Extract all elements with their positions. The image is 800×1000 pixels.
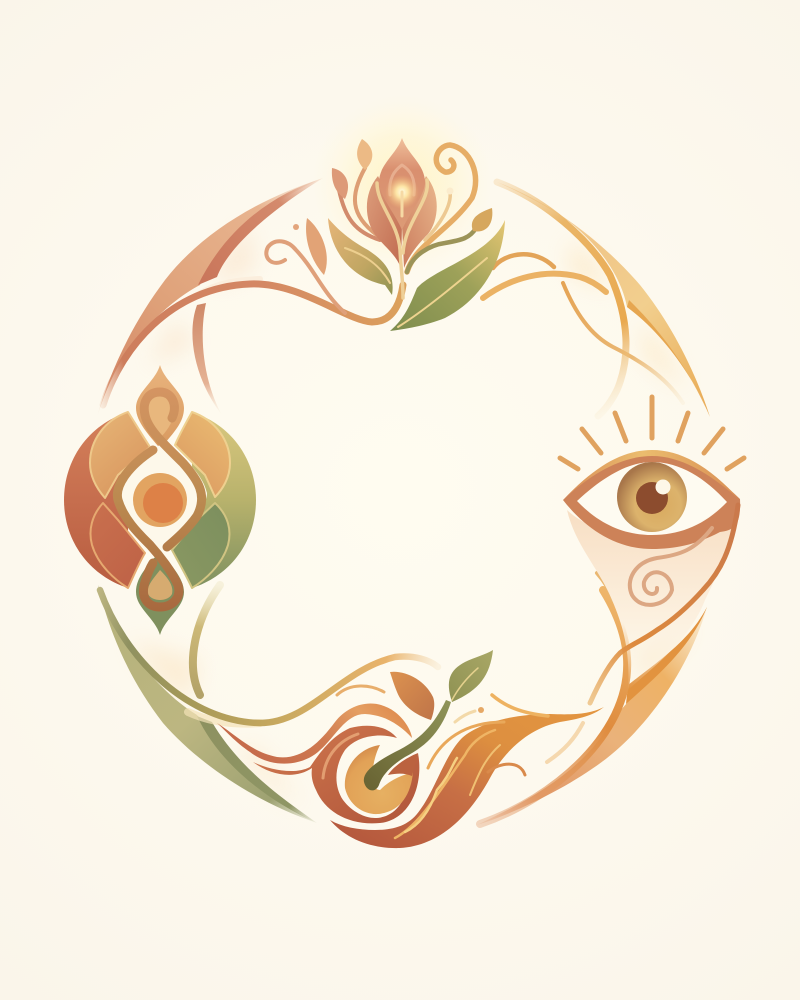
eye emblem	[560, 397, 744, 703]
seed	[345, 745, 413, 814]
orb	[133, 473, 187, 527]
soft peach shading inside the arcs	[130, 225, 690, 805]
lower left petal	[90, 503, 145, 588]
sprout stem	[364, 700, 451, 790]
ring of arcs and vines	[97, 178, 710, 825]
flower light core	[385, 175, 419, 216]
sprout right leaf	[449, 650, 493, 702]
right leaf	[390, 220, 505, 331]
arc: bottom left crescent	[98, 585, 438, 823]
arc: top right crescent	[483, 182, 710, 417]
swirl highlight	[323, 734, 358, 778]
lens right	[192, 412, 256, 588]
iris	[617, 462, 687, 532]
sprout left leaf	[390, 672, 434, 720]
upper flowing band	[217, 704, 412, 764]
bottom drop	[136, 554, 184, 635]
vine from eye	[590, 505, 738, 703]
flower outer petals	[367, 176, 402, 268]
upper right petal	[175, 412, 230, 497]
upper left petal	[90, 412, 150, 498]
seed tip wedge	[388, 753, 418, 776]
centre cream gap	[116, 443, 207, 553]
flower bud	[379, 138, 425, 230]
ribbon upper strand	[144, 392, 202, 547]
ribbon lower strand first half	[117, 450, 153, 545]
flower centre stem	[377, 183, 403, 298]
eye lids	[563, 452, 740, 549]
spiral	[630, 528, 712, 605]
flower emblem	[266, 95, 505, 331]
swirl ring	[253, 726, 419, 823]
rays	[560, 397, 744, 469]
wing	[330, 707, 604, 848]
lens left	[64, 412, 128, 588]
wing highlights	[395, 695, 548, 838]
tear shade	[567, 510, 735, 690]
sprouting seed emblem bottom	[217, 650, 604, 848]
twin leaf emblem left	[64, 365, 256, 635]
upper lid highlight	[563, 450, 740, 500]
arc: top left crescent	[97, 178, 323, 417]
glow behind flower	[312, 95, 492, 275]
bud inner petal highlights	[390, 165, 414, 195]
left leaf	[328, 218, 393, 295]
vine: left top sweep	[103, 279, 403, 405]
top drop	[136, 365, 184, 446]
side sprigs	[266, 139, 492, 313]
lower right petal	[172, 503, 229, 588]
ribbon lower strand second half	[143, 545, 179, 607]
arc: bottom right crescent	[477, 573, 707, 825]
eye white	[577, 460, 727, 535]
